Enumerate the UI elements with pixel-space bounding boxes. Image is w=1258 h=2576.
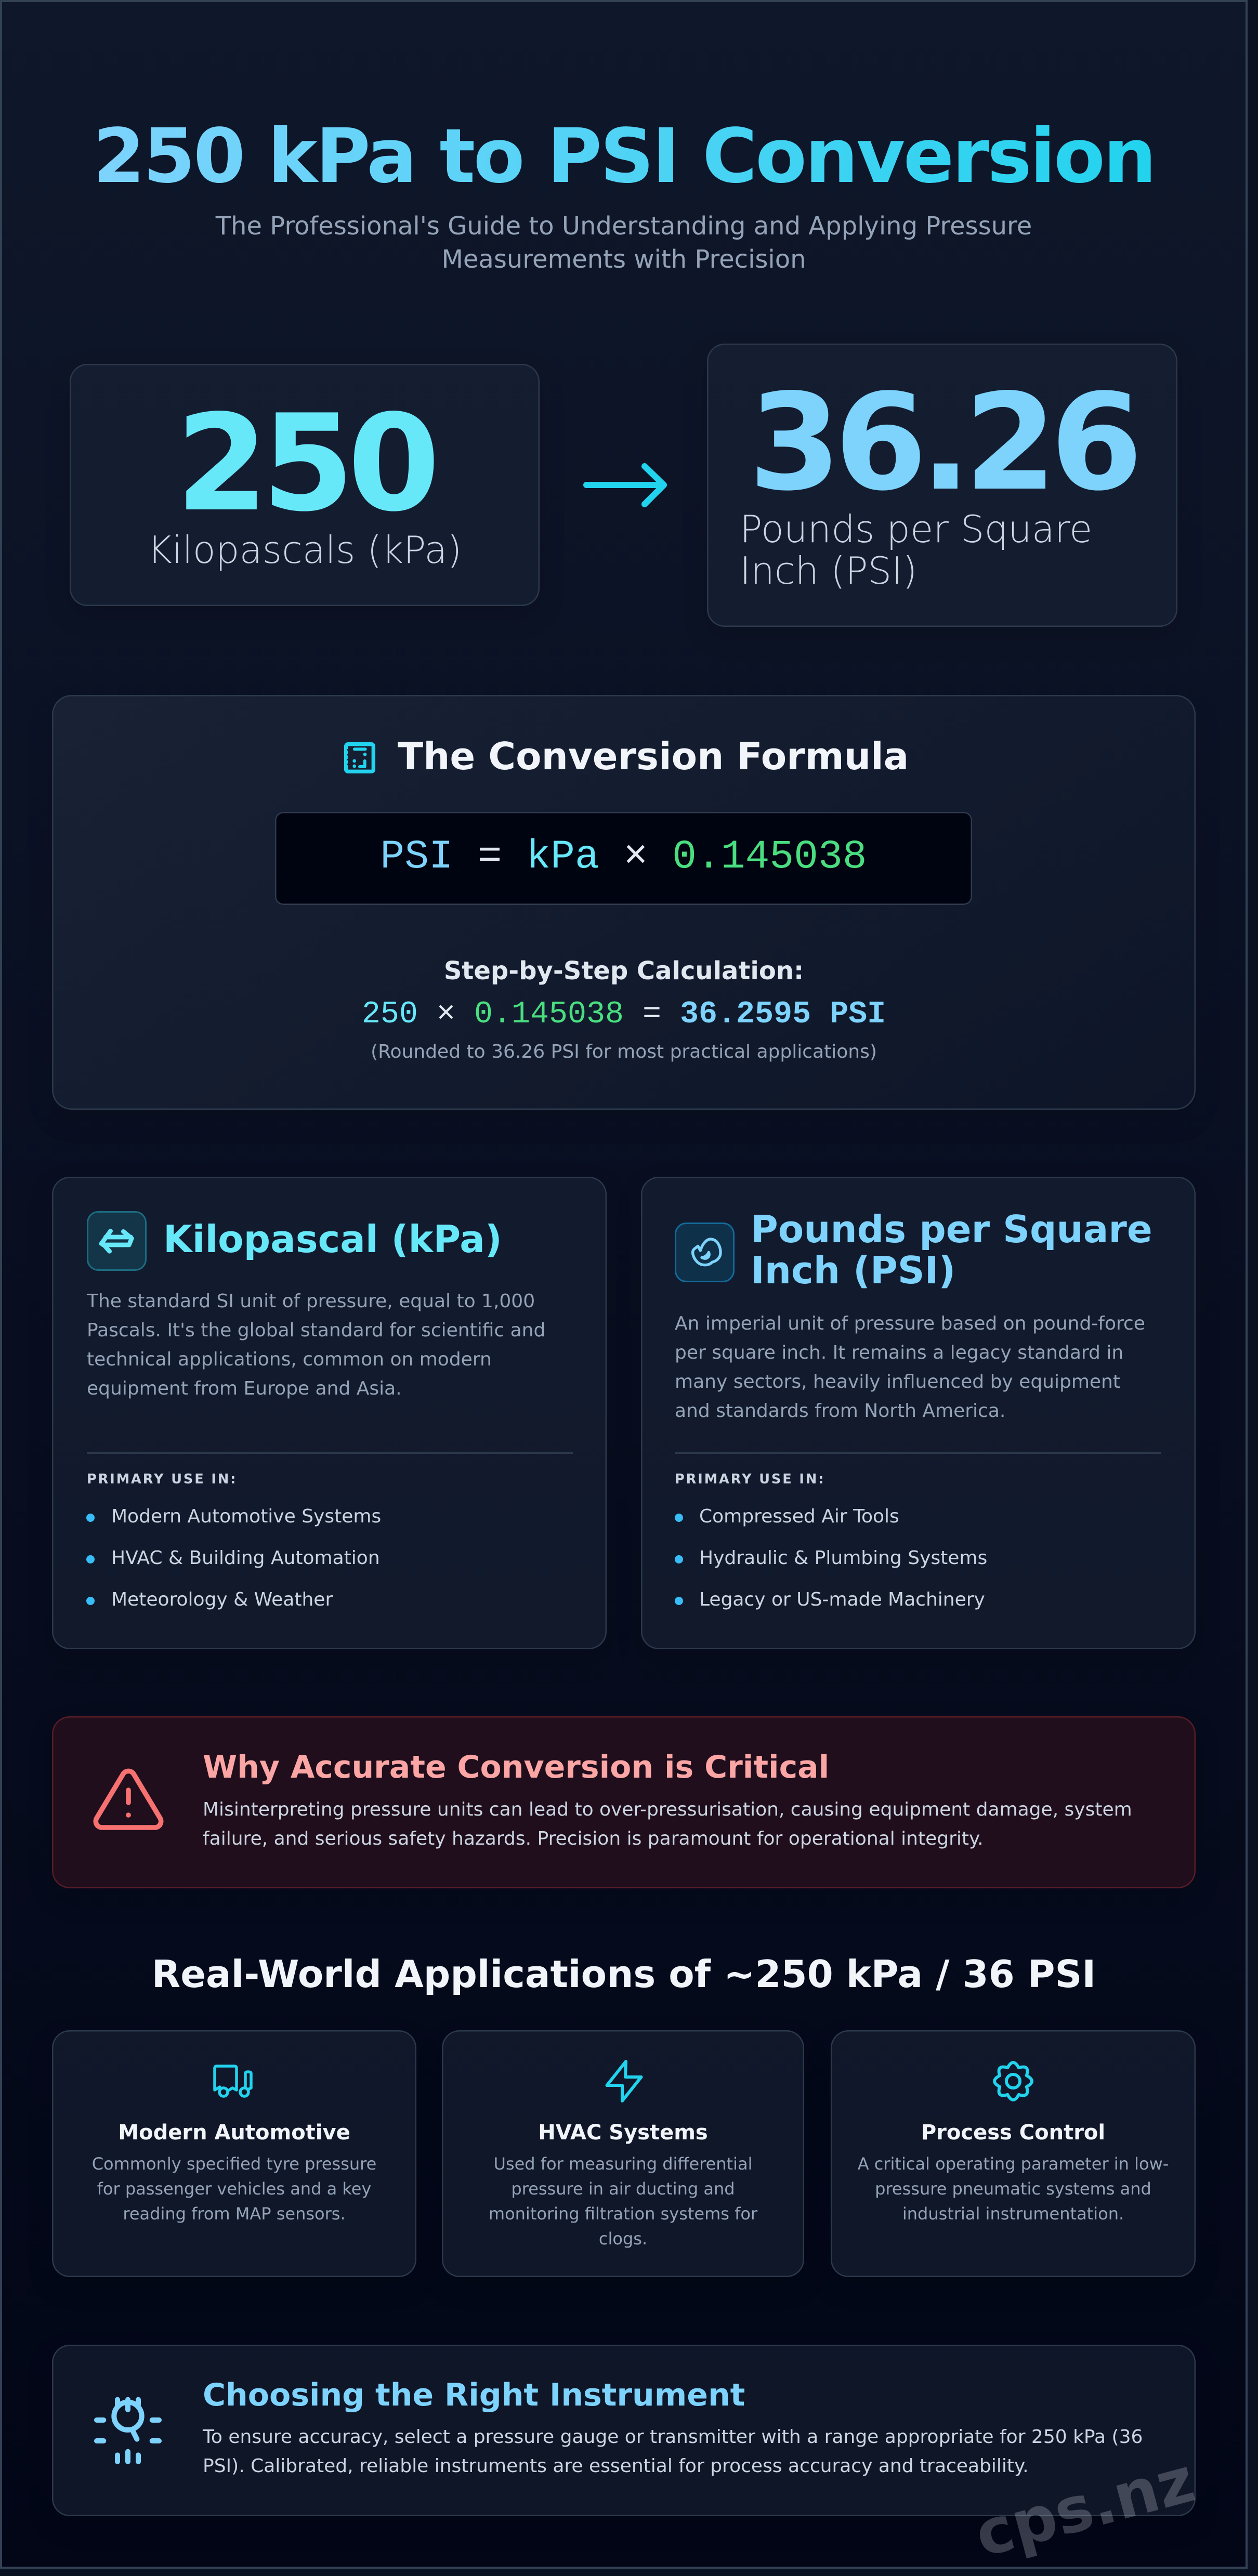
- list of uses: Compressed Air Tools: [699, 1506, 899, 1527]
- card text: pressure in air ducting and: [511, 2179, 735, 2199]
- description: per square inch. It remains a legacy standard in: [675, 1342, 1123, 1363]
- card text: monitoring filtration systems for: [489, 2204, 757, 2224]
- list of uses: Meteorology & Weather: [111, 1589, 333, 1610]
- card text: clogs.: [599, 2229, 647, 2249]
- unit label: pounds per square inch: Inch (PSI): [740, 549, 918, 593]
- card text: Commonly specified tyre pressure: [92, 2154, 376, 2174]
- subtitle: The Professional's Guide to Understanding and Applying Pressure: [216, 212, 1032, 241]
- panel: kilopascal: [52, 1177, 607, 1649]
- rounding note: (Rounded to 36.26 PSI for most practical applications): [371, 1041, 877, 1062]
- instrument text: [203, 2423, 1143, 2481]
- arrow: [583, 463, 667, 507]
- card title: Modern Automotive: [118, 2121, 350, 2145]
- list of uses: HVAC & Building Automation: [111, 1547, 380, 1569]
- description: An imperial unit of pressure based on pound-force: [675, 1313, 1145, 1334]
- heading: pounds per square inch: Inch (PSI): [751, 1248, 955, 1292]
- card text: [92, 2154, 376, 2224]
- panel: PSI value: [707, 344, 1177, 627]
- panel: hvac systems: [442, 2030, 804, 2277]
- panel: psi: [641, 1177, 1196, 1649]
- list of uses: Legacy or US-made Machinery: [699, 1589, 985, 1610]
- unit label: pounds per square inch: Pounds per Square: [740, 507, 1092, 551]
- panel: warning callout: [52, 1716, 1196, 1888]
- card text: pressure pneumatic systems and: [875, 2179, 1151, 2199]
- warning text: Misinterpreting pressure units can lead to over-pressurisation, causing equipment damage, system: [203, 1798, 1132, 1820]
- description: Pascals. It's the global standard for scientific and: [87, 1319, 545, 1341]
- heading: formula: The Conversion Formula: [398, 734, 909, 778]
- formula box: [275, 812, 972, 905]
- description: The standard SI unit of pressure, equal to 1,000: [87, 1290, 535, 1312]
- description: equipment from Europe and Asia.: [87, 1377, 402, 1399]
- panel: modern automotive: [52, 2030, 416, 2277]
- subtitle: Measurements with Precision: [441, 245, 806, 274]
- list of uses: [86, 1506, 381, 1610]
- panel: process control: [831, 2030, 1196, 2277]
- heading: pounds per square inch: Pounds per Square: [751, 1207, 1152, 1251]
- icon: exchange arrows: [87, 1211, 147, 1271]
- calculation: 250 × 0.145038 = 36.2595 PSI: [362, 997, 886, 1032]
- panel: conversion formula: [52, 695, 1196, 1110]
- card text: [442, 2151, 804, 2251]
- list of uses: Modern Automotive Systems: [111, 1506, 381, 1527]
- label: primary use: PRIMARY USE IN:: [675, 1471, 825, 1487]
- subtitle: [215, 212, 1032, 274]
- value: 36.26: 36.26: [749, 365, 1136, 520]
- heading: kilopascal: Kilopascal (kPa): [163, 1217, 502, 1261]
- heading: warning: Why Accurate Conversion is Critical: [203, 1749, 829, 1785]
- step heading: Step-by-Step Calculation:: [444, 956, 804, 985]
- icon: pressure gauge: [78, 2381, 182, 2474]
- description: many sectors, heavily influenced by equipment: [675, 1371, 1120, 1392]
- label: primary use: PRIMARY USE IN:: [87, 1471, 237, 1487]
- card text: reading from MAP sensors.: [123, 2204, 346, 2224]
- title: 250 kPa to PSI Conversion: [93, 112, 1155, 200]
- formula text: PSI = kPa × 0.145038: [380, 834, 867, 880]
- card text: A critical operating parameter in low-: [858, 2154, 1169, 2174]
- icon: flame: [675, 1223, 735, 1282]
- card text: industrial instrumentation.: [902, 2204, 1124, 2224]
- icon: truck: [213, 2065, 253, 2098]
- icon: gear: [987, 2055, 1039, 2107]
- icon: lightning bolt: [605, 2060, 643, 2102]
- card title: Process Control: [921, 2121, 1105, 2145]
- description: and standards from North America.: [675, 1400, 1005, 1421]
- watermark: cps.nz: [968, 2444, 1202, 2571]
- warning text: [203, 1798, 1132, 1849]
- value: 250: 250: [176, 386, 434, 541]
- card text: for passenger vehicles and a key: [97, 2179, 371, 2199]
- instrument text: To ensure accuracy, select a pressure gauge or transmitter with a range appropriate for 250 kPa (36: [203, 2426, 1143, 2448]
- description: [86, 1290, 545, 1399]
- instrument text: PSI). Calibrated, reliable instruments are essential for process accuracy and traceability.: [203, 2455, 1029, 2477]
- heading: instrument: Choosing the Right Instrument: [203, 2377, 745, 2413]
- warning text: failure, and serious safety hazards. Precision is paramount for operational integrity.: [203, 1828, 984, 1849]
- heading: real-world applications: Real-World Applications of ~250 kPa / 36 PSI: [152, 1952, 1096, 1996]
- description: [675, 1313, 1145, 1421]
- icon: warning triangle: [94, 1768, 163, 1830]
- heading: pounds per square inch: [751, 1207, 1152, 1292]
- panel: choosing the right instrument: [52, 2345, 1196, 2516]
- card text: Used for measuring differential: [494, 2154, 752, 2174]
- unit label: kilopascals: Kilopascals (kPa): [148, 528, 462, 572]
- card text: [831, 2151, 1196, 2226]
- list of uses: Hydraulic & Plumbing Systems: [699, 1547, 987, 1569]
- panel: kPa value: [70, 364, 540, 606]
- icon: calculator: [344, 742, 375, 773]
- description: technical applications, common on modern: [87, 1348, 492, 1370]
- unit label: pounds per square inch: [740, 507, 1092, 593]
- list of uses: [675, 1506, 987, 1610]
- card title: HVAC Systems: [538, 2121, 708, 2145]
